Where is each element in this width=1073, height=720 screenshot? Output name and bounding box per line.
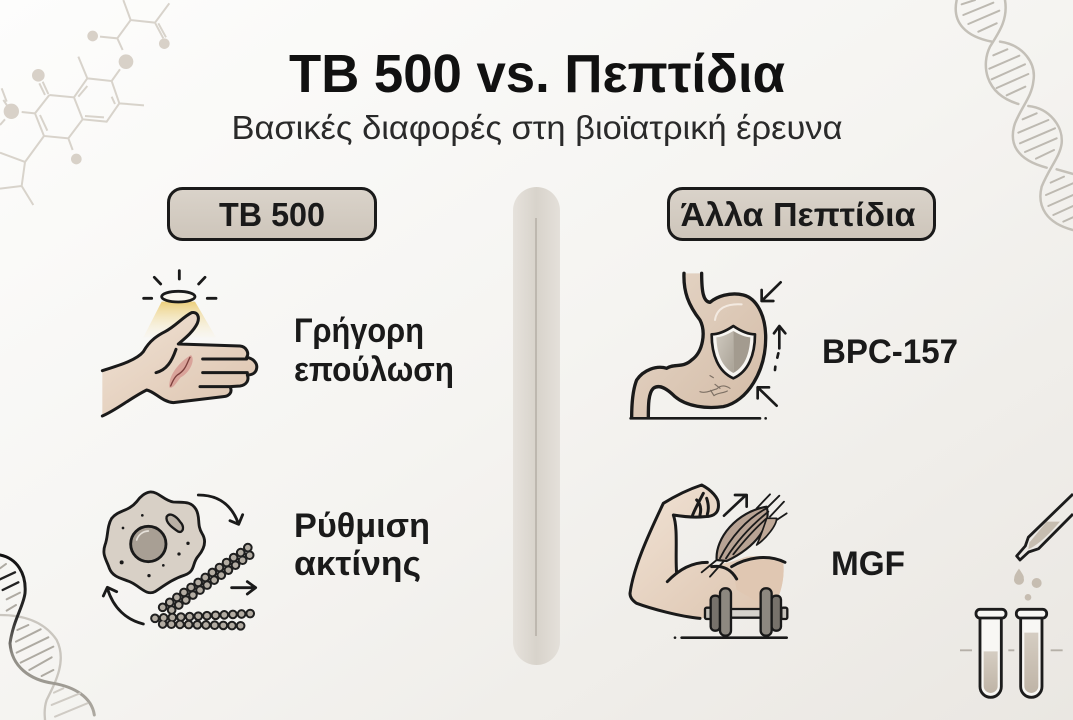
label: Γρήγορη επούλωση: επούλωση: [294, 351, 454, 389]
icon: test tube right: [1016, 609, 1047, 698]
decoration: molecule top left: [0, 0, 170, 205]
subtitle: Βασικές διαφορές στη βιοϊατρική έρευνα: [232, 109, 842, 146]
icon: healing hand: [102, 271, 257, 416]
label: Γρήγορη επούλωση: [294, 312, 454, 389]
decoration: DNA bottom left: [0, 555, 94, 720]
icon: test tube left: [976, 609, 1006, 698]
label: MGF: MGF: [831, 545, 905, 583]
icon: cell and actin filaments: [103, 492, 256, 626]
label: Ρύθμιση ακτίνης: Ρύθμιση: [294, 507, 430, 545]
icon: dropper: [1017, 494, 1073, 560]
icon: drops: [1014, 569, 1042, 601]
heading pill: Άλλα Πεπτίδια: Άλλα Πεπτίδια: [680, 196, 916, 233]
label: Ρύθμιση ακτίνης: [294, 507, 430, 583]
title: TB 500 vs. Πεπτίδια: [289, 44, 785, 104]
label: Ρύθμιση ακτίνης: ακτίνης: [294, 545, 421, 583]
label: BPC-157: BPC-157: [822, 333, 958, 371]
tick marks: [960, 648, 1063, 653]
icon: flexed arm, muscle and dumbbell: [630, 485, 787, 639]
heading pill: TB 500: TB 500: [219, 196, 325, 233]
decoration: DNA top right: [956, 0, 1073, 230]
label: Γρήγορη επούλωση: Γρήγορη: [294, 312, 424, 350]
icon: stomach with shield: [631, 273, 785, 420]
heading pill: TB 500: [168, 188, 376, 240]
decoration: dropper and test tubes: [960, 494, 1073, 698]
central divider: [513, 187, 560, 665]
heading pill: Άλλα Πεπτίδια: [668, 188, 934, 240]
